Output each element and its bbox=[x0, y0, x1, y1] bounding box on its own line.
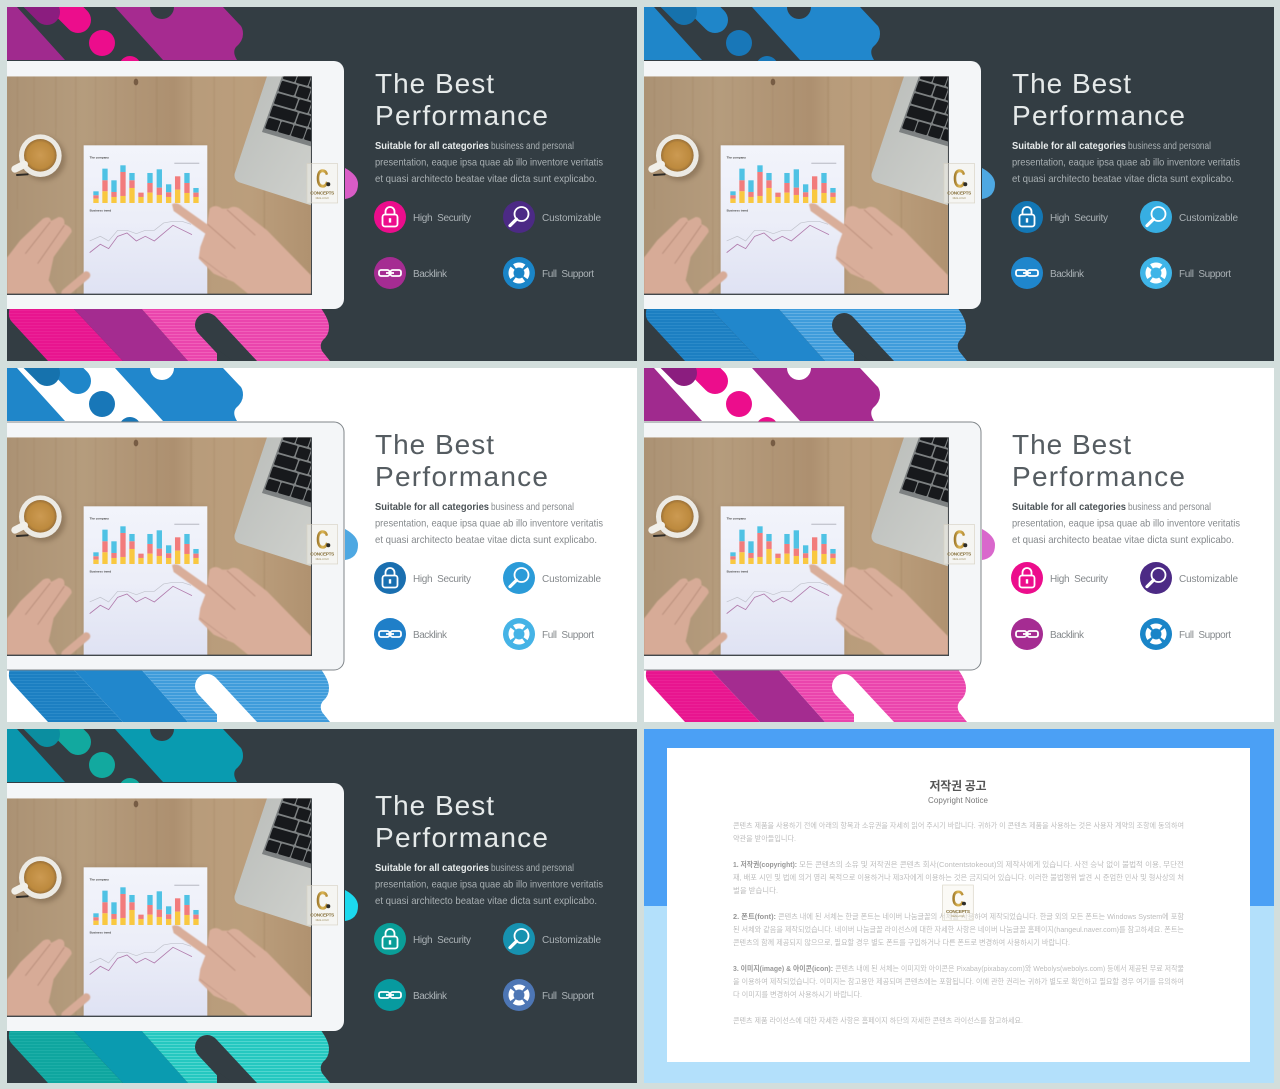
feature: customizable: Customizable bbox=[542, 213, 601, 224]
notice body text: 콘텐츠 내에 된 서체는 한글 폰트는 네이버 나눔글꼴의 서체를 사용하여 제작되었습니다. 한글 외의 모든 폰트는 Windows System에 포함 bbox=[778, 912, 1184, 921]
panel: dark magenta slide bbox=[0, 0, 637, 385]
panel: dark teal slide bbox=[0, 709, 637, 1089]
body text: presentation, eaque ipsa quae ab illo inventore veritatis bbox=[375, 518, 603, 530]
logo watermark bbox=[307, 525, 338, 564]
feature: customizable bbox=[503, 923, 601, 955]
top shapes bbox=[644, 348, 880, 439]
feature: full support bbox=[1140, 618, 1231, 650]
notice body text: 3. 이미지(image) & 아이콘(icon): bbox=[733, 964, 833, 973]
body text bbox=[375, 863, 603, 907]
side tab bbox=[982, 529, 995, 560]
tablet bbox=[624, 61, 981, 309]
notice body text: 1. 저작권(copyright): bbox=[733, 860, 797, 869]
body text bbox=[375, 141, 603, 185]
feature: high security bbox=[374, 562, 471, 594]
title: Performance bbox=[1012, 461, 1185, 492]
bottom shapes bbox=[8, 309, 330, 361]
top shapes bbox=[7, 368, 243, 422]
notice body text: 재, 배포 시민 및 법에 의거 영리 목적으로 이용하거나 제3자에게 이용하는 것은 금지되어 있습니다. 이러한 불법행위 발견 시 준엄한 민사 및 형사상의 처 bbox=[733, 873, 1184, 882]
feature: full support bbox=[1140, 257, 1231, 289]
feature: full support: Full Support bbox=[1179, 630, 1231, 641]
notice body text: 콘텐츠의 함께 제공되지 않으므로, 필요할 경우 별도 폰트를 구입하거나 다른 폰트로 변경하여 사용하시기 바랍니다. bbox=[733, 938, 1070, 947]
body text: presentation, eaque ipsa quae ab illo inventore veritatis bbox=[1012, 158, 1240, 168]
feature: backlink bbox=[374, 618, 448, 650]
notice body text: 을 이용하여 제작되었습니다. 이미지는 참고용만 제공되며 콘텐츠에는 포함됩니다. 이에 관한 권리는 귀하가 별도로 확인하고 필요할 경우 여기를 유의하여 bbox=[733, 977, 1184, 986]
side tab bbox=[982, 168, 995, 199]
notice body text: 콘텐츠 내에 된 서체는 이미지와 아이콘은 Pixabay(pixabay.com)와 Webolys(webolys.com) 등에서 제공된 무료 저작물 bbox=[835, 964, 1184, 973]
body text: Suitable for all categories bbox=[1012, 141, 1126, 152]
feature: customizable bbox=[1140, 562, 1238, 594]
body text: et quasi architecto beatae vitae dicta sunt explicabo. bbox=[375, 535, 597, 546]
feature: high security: High Security bbox=[1050, 574, 1108, 585]
feature: backlink: Backlink bbox=[413, 991, 448, 1002]
feature: high security bbox=[374, 923, 471, 955]
body text: presentation, eaque ipsa quae ab illo inventore veritatis bbox=[375, 880, 603, 890]
panel: dark blue slide bbox=[644, 7, 1274, 361]
photo on tablet screen bbox=[644, 429, 988, 656]
feature: full support: Full Support bbox=[542, 269, 594, 280]
panel: white blue slide bbox=[7, 368, 637, 722]
feature: high security bbox=[1011, 201, 1108, 233]
feature: high security: High Security bbox=[413, 935, 471, 946]
feature: full support bbox=[503, 618, 594, 650]
body text: Suitable for all categories bbox=[375, 502, 489, 513]
feature: high security bbox=[1011, 562, 1108, 594]
title: The Best bbox=[375, 429, 494, 460]
notice heading: 저작권 공고 bbox=[930, 778, 986, 793]
feature: backlink bbox=[374, 257, 448, 289]
feature: customizable: Customizable bbox=[1179, 213, 1238, 224]
notice heading bbox=[928, 778, 989, 805]
body text: Suitable for all categories bbox=[375, 863, 489, 874]
body text: presentation, eaque ipsa quae ab illo inventore veritatis bbox=[1012, 518, 1240, 530]
logo watermark bbox=[943, 885, 973, 920]
tablet bbox=[0, 783, 344, 1031]
notice body text: 약관을 받아들입니다. bbox=[733, 834, 796, 843]
feature: backlink: Backlink bbox=[413, 269, 448, 280]
panel: copyright notice bbox=[644, 729, 1274, 1083]
side tab bbox=[345, 168, 358, 199]
feature: high security: High Security bbox=[413, 213, 471, 224]
notice body text: 된 서체와 같음을 제작되었습니다. 네이버 나눔글꼴 라이선스에 대한 자세한 사항은 네이버 나눔글꼴 홈페이지(hangeul.naver.com)를 참고하세요. 폰트는 bbox=[733, 925, 1184, 934]
body text: business and personal bbox=[491, 863, 574, 874]
body text: Suitable for all categories bbox=[375, 141, 489, 152]
panel: white magenta slide bbox=[644, 368, 1274, 722]
top shapes bbox=[7, 709, 243, 800]
feature: backlink: Backlink bbox=[1050, 630, 1085, 641]
feature: full support bbox=[503, 979, 594, 1011]
notice body text: 모든 콘텐츠의 소유 및 저작권은 콘텐츠 회사(Contentstokeout)의 제작사에게 있습니다. 사전 승낙 없이 불법적 이용, 무단전 bbox=[799, 860, 1184, 869]
title: Performance bbox=[375, 461, 548, 492]
logo watermark bbox=[944, 525, 975, 564]
body text: presentation, eaque ipsa quae ab illo inventore veritatis bbox=[375, 158, 603, 168]
body text: business and personal bbox=[491, 141, 574, 152]
feature: customizable: Customizable bbox=[542, 935, 601, 946]
notice body text: 다 이미지를 변경하여 사용하시기 바랍니다. bbox=[733, 990, 862, 999]
feature: backlink: Backlink bbox=[413, 630, 448, 641]
body text: et quasi architecto beatae vitae dicta sunt explicabo. bbox=[1012, 174, 1234, 185]
top shapes bbox=[7, 7, 243, 61]
body text bbox=[1012, 141, 1240, 185]
title: The Best bbox=[375, 790, 494, 821]
feature: backlink bbox=[1011, 257, 1085, 289]
notice body text: 콘텐츠 제품 라이선스에 대한 자세한 사항은 홈페이지 하단의 자세한 콘텐츠 라이선스를 참고하세요. bbox=[733, 1016, 1023, 1025]
notice body text: 벌을 받습니다. bbox=[733, 886, 778, 895]
feature: high security: High Security bbox=[1050, 213, 1108, 224]
feature: customizable bbox=[503, 562, 601, 594]
body text: business and personal bbox=[1128, 502, 1211, 513]
notice body text: 2. 폰트(font): bbox=[733, 912, 776, 921]
bottom shapes bbox=[646, 668, 967, 746]
feature: high security: High Security bbox=[413, 574, 471, 585]
bottom shapes bbox=[646, 309, 967, 361]
tablet bbox=[624, 422, 981, 670]
title: The Best bbox=[1012, 68, 1131, 99]
tablet bbox=[0, 422, 344, 670]
feature: full support: Full Support bbox=[542, 991, 594, 1002]
photo on tablet screen bbox=[644, 76, 949, 295]
body text: et quasi architecto beatae vitae dicta sunt explicabo. bbox=[375, 174, 597, 185]
top shapes bbox=[644, 7, 880, 61]
feature: customizable bbox=[503, 201, 601, 233]
feature: customizable: Customizable bbox=[542, 574, 601, 585]
feature: high security bbox=[374, 201, 471, 233]
side tab bbox=[345, 890, 358, 921]
tablet bbox=[0, 61, 344, 309]
notice heading: Copyright Notice bbox=[928, 796, 989, 805]
feature: backlink bbox=[374, 979, 448, 1011]
title: The Best bbox=[1012, 429, 1131, 460]
body text: business and personal bbox=[1128, 141, 1211, 152]
feature: customizable: Customizable bbox=[1179, 574, 1238, 585]
feature: full support bbox=[503, 257, 594, 289]
title: Performance bbox=[1012, 100, 1185, 131]
body text: et quasi architecto beatae vitae dicta sunt explicabo. bbox=[375, 896, 597, 907]
feature: full support: Full Support bbox=[1179, 269, 1231, 280]
bottom shapes bbox=[8, 670, 330, 722]
title: The Best bbox=[375, 68, 494, 99]
feature: full support: Full Support bbox=[542, 630, 594, 641]
feature: customizable bbox=[1140, 201, 1238, 233]
logo watermark bbox=[307, 164, 338, 203]
body text: Suitable for all categories bbox=[1012, 502, 1126, 513]
title: Performance bbox=[375, 100, 548, 131]
body text: et quasi architecto beatae vitae dicta sunt explicabo. bbox=[1012, 535, 1234, 546]
body text bbox=[1012, 502, 1240, 546]
notice body text bbox=[733, 821, 1184, 1025]
photo on tablet screen bbox=[7, 790, 351, 1017]
side tab bbox=[345, 529, 358, 560]
bottom shapes bbox=[9, 1029, 330, 1089]
photo on tablet screen bbox=[7, 437, 312, 656]
photo on tablet screen bbox=[7, 76, 312, 295]
feature: backlink bbox=[1011, 618, 1085, 650]
logo watermark bbox=[307, 886, 338, 925]
logo watermark bbox=[944, 164, 975, 203]
title: Performance bbox=[375, 822, 548, 853]
notice body text: 콘텐츠 제품을 사용하기 전에 아래의 항목과 소유권을 자세히 읽어 주시기 바랍니다. 귀하가 이 콘텐츠 제품을 사용하는 것은 사용자 계약의 조항에 동의하여 bbox=[733, 821, 1184, 830]
body text: business and personal bbox=[491, 502, 574, 513]
body text bbox=[375, 502, 603, 546]
feature: backlink: Backlink bbox=[1050, 269, 1085, 280]
